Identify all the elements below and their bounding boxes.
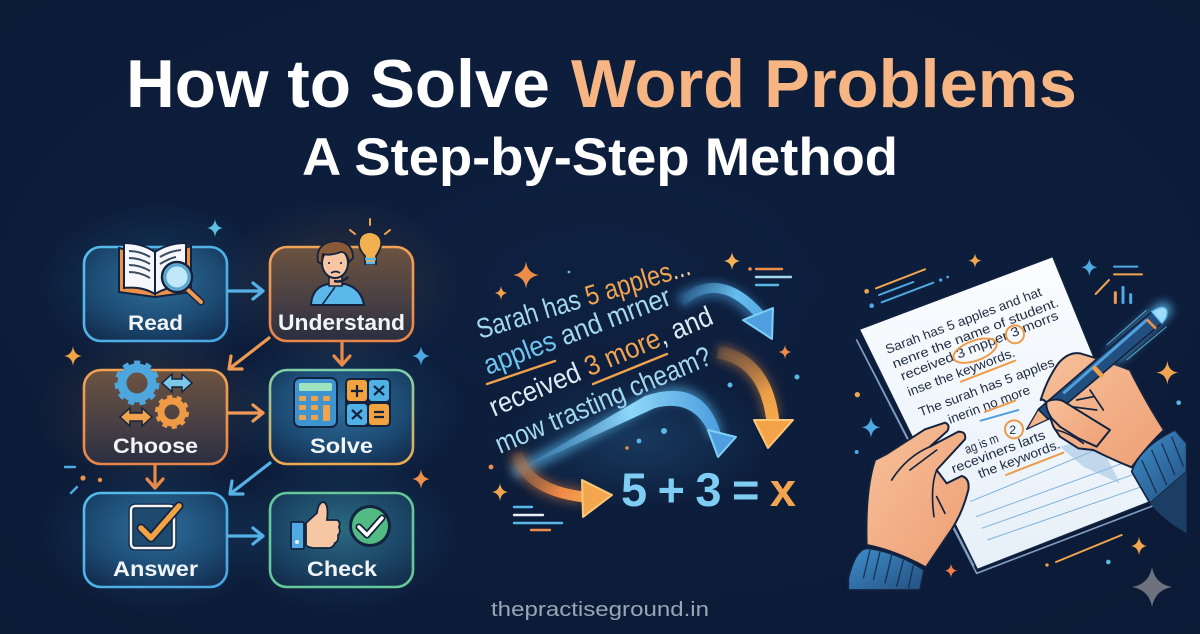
word problem text bbox=[473, 250, 717, 460]
icon: thinking person with light bulb bbox=[311, 219, 390, 305]
flowchart panel: six steps bbox=[35, 200, 462, 615]
panel: annotating paper with hands bbox=[848, 253, 1187, 590]
glowing pen bbox=[1027, 307, 1167, 429]
paper text: 2 bbox=[1009, 423, 1016, 437]
icon: gears and arrows bbox=[117, 363, 192, 427]
paper text: inse the keywords. bbox=[905, 345, 1017, 399]
title: How to Solve bbox=[126, 46, 550, 122]
arrow: orange to equation bbox=[517, 453, 612, 517]
paper text: ag is m bbox=[962, 430, 1000, 457]
label: Solve: Solve bbox=[310, 435, 373, 458]
step: Read bbox=[84, 243, 227, 341]
arrow: curved orange right bbox=[718, 352, 793, 448]
label: Answer: Answer bbox=[113, 558, 198, 581]
paper text: The surah has 5 apples bbox=[916, 354, 1057, 419]
arrow: blue sweep bbox=[513, 391, 736, 473]
step: Solve bbox=[270, 370, 413, 464]
paper text: nenre the name of student. bbox=[890, 295, 1061, 371]
right hand finger lines bbox=[1057, 390, 1103, 443]
step: Understand bbox=[270, 219, 413, 341]
keyword underlines bbox=[487, 354, 667, 384]
flowchart arrows bbox=[147, 283, 350, 544]
word problem text: apples and mrner bbox=[479, 281, 675, 381]
icon: checkbox with checkmark bbox=[131, 506, 179, 548]
paper text: the keywords. bbox=[976, 436, 1062, 481]
footer url: thepractiseground.in bbox=[491, 599, 709, 621]
icon: thumbs up and green check bbox=[291, 502, 391, 549]
label: Understand: Understand bbox=[278, 310, 405, 335]
watermark star bbox=[1132, 567, 1172, 607]
paper text: receviners larts bbox=[949, 427, 1048, 476]
step: Answer bbox=[84, 493, 227, 587]
left sleeve bbox=[848, 548, 924, 590]
icon: calculator and operators bbox=[294, 378, 391, 427]
right hand bbox=[1041, 353, 1164, 467]
right sleeve bbox=[1132, 430, 1187, 533]
orange keyword annotations bbox=[950, 325, 1063, 475]
step: Check bbox=[270, 493, 413, 587]
icon: open book with magnifier bbox=[119, 243, 201, 302]
word problem text: Sarah has 5 apples... bbox=[473, 250, 694, 345]
arrow: curved blue top bbox=[680, 288, 773, 339]
label: Read: Read bbox=[128, 312, 183, 335]
paper text: Sarah has 5 apples and hat bbox=[883, 284, 1044, 357]
label: Check: Check bbox=[307, 558, 377, 581]
left finger lines bbox=[892, 447, 945, 517]
title: Word Problems bbox=[571, 46, 1077, 122]
panel: word problem to equation bbox=[473, 250, 800, 530]
word problem text: mow trasting cheam? bbox=[490, 340, 716, 460]
paper text: inerin no more bbox=[946, 382, 1032, 427]
word problem text: received 3 more, and bbox=[484, 300, 717, 423]
subtitle: A Step-by-Step Method bbox=[302, 128, 898, 187]
paper sheet bbox=[857, 257, 1155, 573]
left hand bbox=[866, 423, 969, 567]
right thumb bbox=[1046, 400, 1110, 447]
equation: 5 + 3 = x bbox=[621, 463, 796, 516]
step: Choose bbox=[84, 363, 227, 464]
sparkles and accents bbox=[855, 253, 1181, 578]
title bbox=[126, 46, 1077, 122]
flowchart sparkles and accents bbox=[64, 219, 430, 493]
sparkles and accent dots bbox=[489, 252, 800, 530]
paper text: received 3 mpper 3 morrs bbox=[898, 308, 1061, 383]
paper text bbox=[883, 284, 1062, 481]
label: Choose: Choose bbox=[113, 435, 198, 458]
